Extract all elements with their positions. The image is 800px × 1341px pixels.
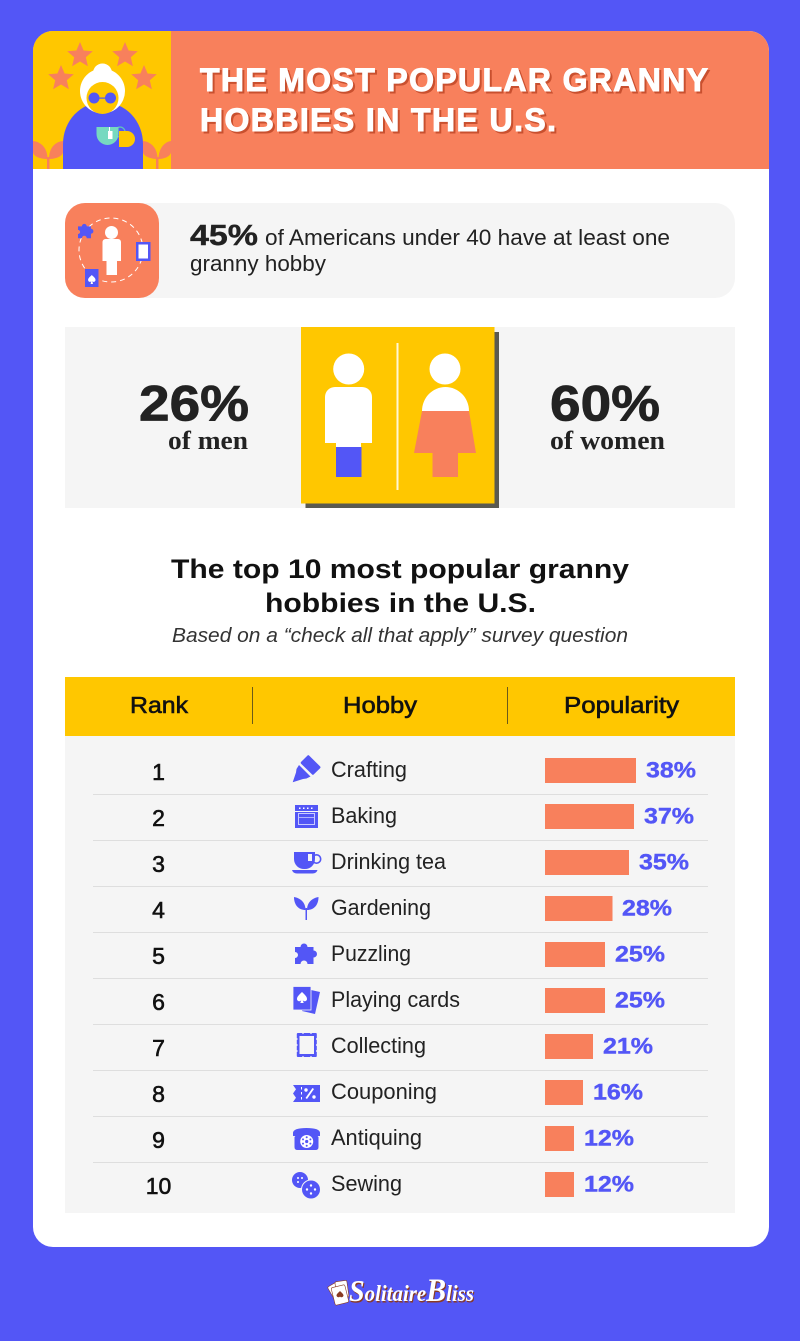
icon: men and women figures	[301, 327, 499, 508]
table: top 10 hobbies	[65, 677, 735, 1213]
icon: playing cards	[293, 986, 320, 1014]
hobby names: Puzzling	[331, 941, 411, 966]
rank numbers: 6	[152, 989, 165, 1015]
bar chart: popularity: 28%	[622, 896, 672, 920]
panel: header banner	[33, 31, 769, 169]
stat: women: 60%	[550, 376, 660, 432]
rank numbers: 3	[152, 851, 165, 877]
icon: glue bottle	[293, 756, 319, 782]
hobby names: Couponing	[331, 1079, 437, 1104]
rank numbers: 10	[146, 1173, 171, 1199]
table header: Hobby	[343, 692, 418, 718]
bar chart: popularity: 12%	[584, 1126, 634, 1150]
logo: Solitaire Bliss: SolitaireBliss	[349, 1273, 474, 1309]
hobby names: Antiquing	[331, 1125, 422, 1150]
hobby names: Crafting	[331, 757, 407, 782]
panel: men vs women	[65, 327, 735, 508]
heading: top 10	[171, 554, 629, 618]
icon: buttons	[292, 1172, 320, 1199]
icon: puzzle piece	[295, 944, 317, 964]
logo: Solitaire Bliss: SolitaireBliss	[350, 1274, 475, 1310]
hobby names	[331, 757, 460, 1196]
panel: 45% stat	[65, 203, 735, 298]
bar chart: popularity: 25%	[615, 942, 665, 966]
text: 45% of Americans	[190, 220, 670, 276]
bar chart: popularity: 37%	[644, 804, 694, 828]
table header: Rank	[130, 692, 189, 718]
hobby names: Collecting	[331, 1033, 426, 1058]
rank numbers	[146, 759, 171, 1199]
text: 45% of Americans: granny hobby	[190, 251, 326, 276]
bar chart: popularity	[545, 758, 696, 1197]
bar chart: popularity: 25%	[615, 988, 665, 1012]
title: THE MOST POPULAR GRANNY	[200, 62, 708, 98]
stat: men: of men	[168, 426, 249, 455]
subheading: survey note: Based on a “check all that apply” survey question	[172, 625, 628, 647]
bar chart: popularity: 12%	[584, 1172, 634, 1196]
heading: top 10: The top 10 most popular granny	[171, 554, 629, 584]
rank numbers: 7	[152, 1035, 165, 1061]
rank numbers: 4	[152, 897, 165, 923]
icon: stamp	[296, 1032, 318, 1058]
rank numbers: 9	[152, 1127, 165, 1153]
stat: women: of women	[550, 426, 666, 455]
bar chart: popularity: 16%	[593, 1080, 643, 1104]
table header: Popularity	[564, 692, 680, 718]
stat: men: 26%	[139, 376, 249, 432]
table header	[65, 677, 735, 736]
title	[200, 62, 710, 140]
heading: top 10: hobbies in the U.S.	[265, 588, 536, 618]
icon: oven	[295, 805, 318, 828]
icon: granny with tea	[33, 31, 171, 169]
icon: coupon	[293, 1085, 320, 1102]
stat: men	[139, 376, 249, 455]
icon: antique phone	[293, 1128, 320, 1150]
text: 45% of Americans: 45%	[190, 220, 258, 252]
bar chart: popularity: 35%	[639, 850, 689, 874]
hobby names: Gardening	[331, 895, 431, 920]
hobby names: Playing cards	[331, 987, 460, 1012]
rank numbers: 2	[152, 805, 165, 831]
title: HOBBIES IN THE U.S.	[200, 102, 556, 138]
hobby names: Drinking tea	[331, 849, 447, 874]
bar chart: popularity: 21%	[603, 1034, 653, 1058]
rank numbers: 8	[152, 1081, 165, 1107]
rank numbers: 5	[152, 943, 165, 969]
hobby names: Sewing	[331, 1171, 402, 1196]
stat: women	[550, 376, 666, 455]
text: 45% of Americans: of Americans under 40 have at least one	[265, 225, 670, 250]
rank numbers: 1	[152, 759, 165, 785]
hobby names: Baking	[331, 803, 397, 828]
icon: tea cup	[292, 852, 321, 874]
bar chart: popularity: 38%	[646, 758, 696, 782]
icon: sprout	[294, 897, 318, 920]
title: THE MOST POPULAR GRANNY	[202, 64, 710, 100]
icon: person with hobbies	[65, 203, 159, 298]
title: HOBBIES IN THE U.S.	[202, 104, 558, 140]
